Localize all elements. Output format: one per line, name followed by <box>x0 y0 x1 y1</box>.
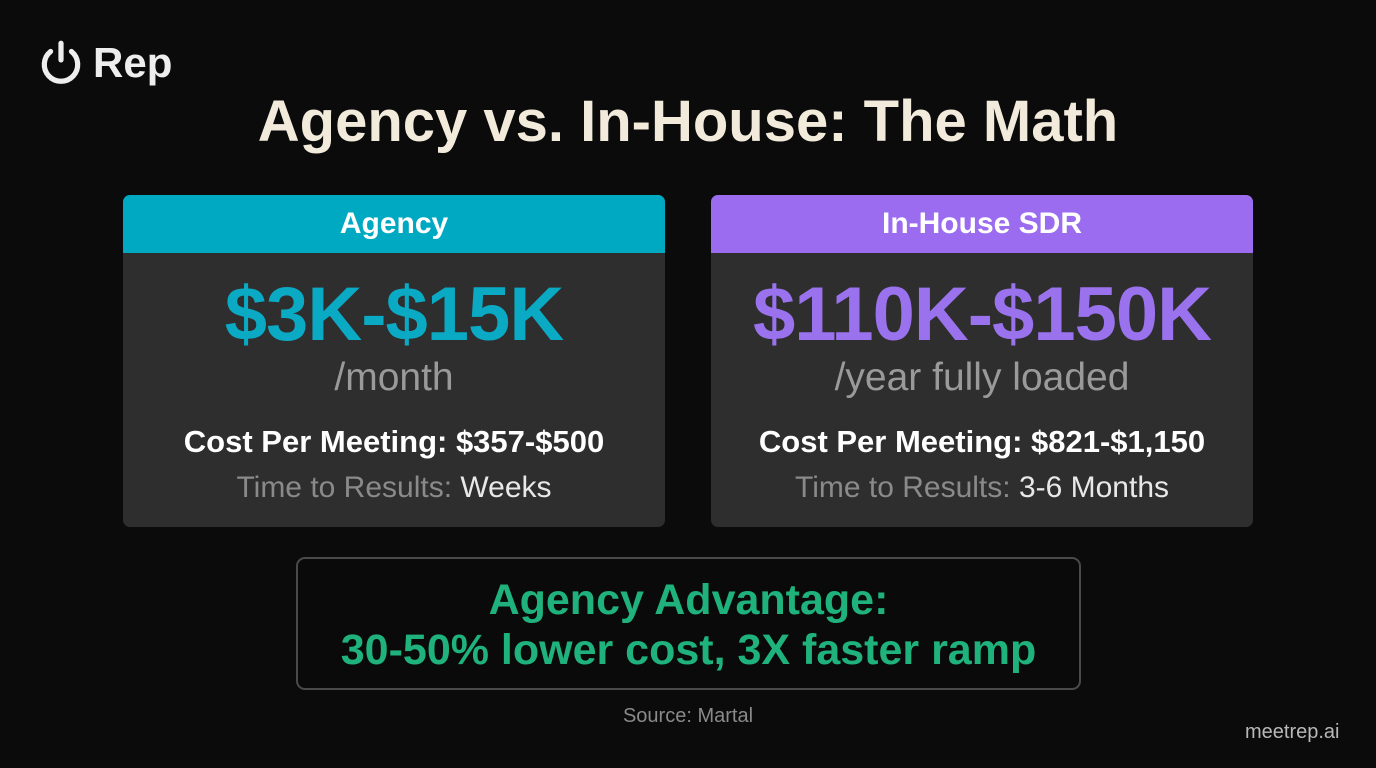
source: Source: Martal <box>623 705 753 727</box>
callout: advantage: 30-50% lower cost, 3X faster ramp <box>341 626 1036 674</box>
panel: agency: Agency <box>340 207 448 240</box>
icon: power <box>42 40 80 84</box>
panel: agency: Time to Results: Weeks <box>236 471 552 504</box>
callout: advantage: Agency Advantage: <box>489 576 888 624</box>
panel: agency: Cost Per Meeting: $357-$500 <box>184 424 604 459</box>
callout: advantage <box>296 557 1081 690</box>
title: Agency vs. In-House: The Math <box>258 89 1118 154</box>
panel: in-house: $110K-$150K <box>753 272 1211 357</box>
panel: agency: $3K-$15K <box>225 272 563 357</box>
logo: Rep <box>93 39 172 86</box>
panel: agency: /month <box>334 356 454 399</box>
panel: in-house: Time to Results: 3-6 Months <box>795 471 1169 504</box>
panel: in-house: In-House SDR <box>882 207 1082 240</box>
panel: agency <box>123 195 665 527</box>
panel: in-house <box>711 195 1253 527</box>
panel: in-house: /year fully loaded <box>835 356 1129 399</box>
panel: in-house: Cost Per Meeting: $821-$1,150 <box>759 424 1205 459</box>
logo <box>42 39 172 86</box>
footer url: meetrep.ai <box>1245 721 1340 743</box>
